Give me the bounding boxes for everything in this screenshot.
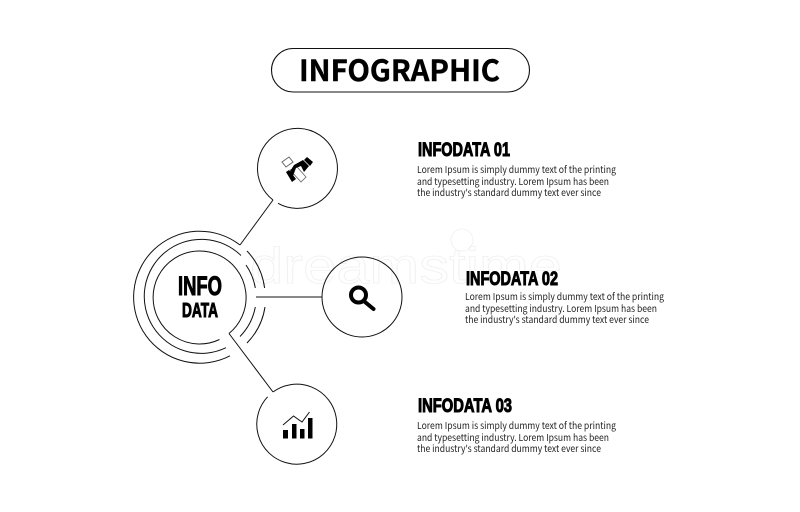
- icon: magnifier: [351, 288, 374, 309]
- text block: infodata 02: and typesetting industry. Lorem Ipsum has been: [465, 301, 657, 315]
- central label: INFO: [178, 271, 222, 301]
- text block: infodata 03: the industry's standard dummy text ever since: [417, 441, 601, 455]
- text block: infodata 02: Lorem Ipsum is simply dummy text of the printing: [465, 289, 665, 303]
- connector: top: [240, 200, 273, 245]
- text block: infodata 03: Lorem Ipsum is simply dummy text of the printing: [417, 418, 617, 432]
- text block: infodata 02: [465, 269, 665, 326]
- central label: [178, 271, 222, 322]
- text block: infodata 03: [417, 396, 617, 455]
- text block: infodata 01: [417, 140, 617, 199]
- text block: infodata 01: Lorem Ipsum is simply dummy text of the printing: [417, 162, 617, 176]
- text block: infodata 01: INFODATA 01: [418, 140, 510, 161]
- text block: infodata 02: INFODATA 02: [466, 269, 558, 290]
- text block: infodata 03: and typesetting industry. Lorem Ipsum has been: [417, 430, 609, 444]
- node circle: bottom: [257, 384, 337, 464]
- connector: middle: [256, 296, 322, 298]
- icon: growth chart: [283, 412, 312, 438]
- text block: infodata 01: the industry's standard dummy text ever since: [417, 185, 601, 199]
- title pill: [272, 48, 530, 92]
- central concentric rings: [134, 231, 265, 363]
- watermark: dreamstime: [250, 238, 562, 294]
- text block: infodata 01: and typesetting industry. Lorem Ipsum has been: [417, 174, 609, 188]
- icon: handshake: [282, 157, 313, 182]
- text block: infodata 02: the industry's standard dummy text ever since: [465, 312, 649, 326]
- node circle: top: [257, 128, 337, 208]
- central label: DATA: [182, 300, 218, 322]
- text block: infodata 03: INFODATA 03: [418, 396, 512, 417]
- node circle: middle: [322, 257, 402, 337]
- title: INFOGRAPHIC: [299, 48, 500, 90]
- connector: bottom: [229, 334, 273, 392]
